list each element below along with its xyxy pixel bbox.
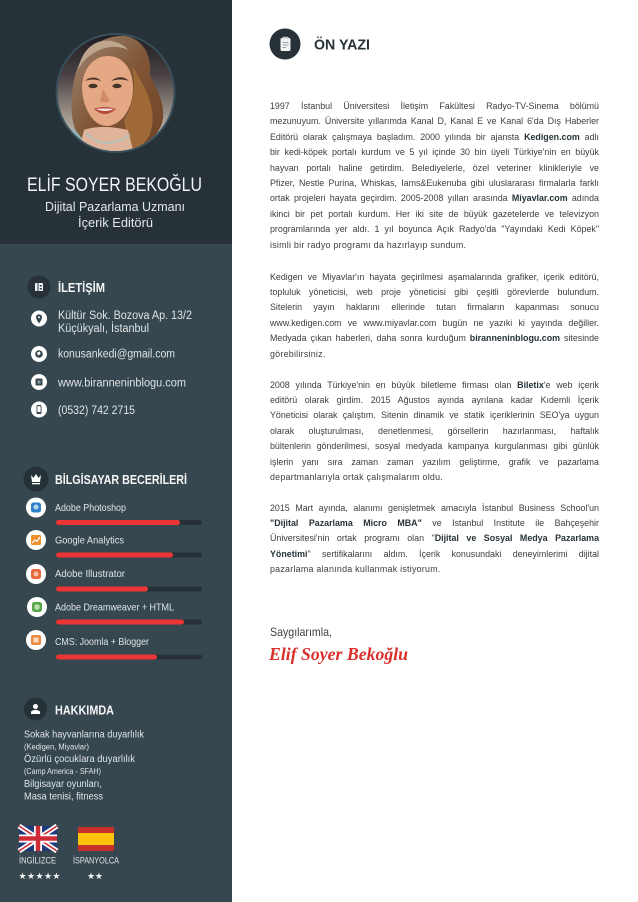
paragraph 3: işlerin yanı sıra zaman zaman yazılım geliştirme, grafik ve pazarlama (270, 456, 599, 466)
paragraph 1: Pfizer, Nestle Purina, Whiskas, Iams&Eukenuba gibi uluslararası firmalarla farklı (270, 178, 599, 188)
website: www.biranneninblogu.com (57, 378, 186, 390)
panel: about (24, 698, 145, 802)
icon: UK flag (19, 826, 57, 851)
paragraph 1: mezunuyum. Üniversite yıllarımda Kanal D, Kanal E ve Kanal 6'da Dış Haberler (270, 116, 599, 126)
paragraph 3: departmanlarıyla ortak çalışmalarım oldu. (270, 472, 443, 482)
paragraph 3: olarak oluşturulması, denetlenmesi, görsellerin hazırlanması, haftalık (270, 426, 599, 436)
paragraph 1: bir kedi-köpek portalı kurdum ve 5 yıl içinde 30 bin üyeli Türkiye'nin en büyük (270, 147, 599, 157)
photo: portrait (55, 33, 176, 154)
skill: CMS: CMS: Joomla + Blogger (55, 636, 149, 648)
address: Kültür Sok. Bozova Ap. 13/2 (58, 310, 192, 322)
paragraph 1: ikinci bir pet portalı kurdum. Her iki site de büyük gazetelerde ve televizyon (270, 209, 599, 219)
icon: Spain flag (78, 827, 114, 851)
paragraph 2: Kedigen ve Miyavlar'ın hayata geçirilmesi aşamalarında grafiker, içerik editörü, (270, 272, 599, 282)
job title line 2: İçerik Editörü (78, 216, 153, 230)
icon: web (31, 374, 47, 390)
paragraph 1: programlarında yer aldı. 1 yıl boyunca Açık Radyo'da "Yayındaki Kedi Köpek" (270, 224, 599, 234)
paragraph 1: isimli bir radyo programı da hazırlayıp sundum. (270, 240, 466, 250)
icon: person (24, 698, 47, 720)
closing: Saygılarımla, (270, 625, 332, 639)
cv graphics layer (0, 0, 408, 902)
skill: CMS (26, 630, 202, 660)
panel: contact (28, 276, 192, 418)
paragraph 4 (270, 502, 600, 574)
icon: location pin (31, 310, 47, 326)
icon: crown (24, 466, 48, 492)
rating: Spanish stars: ★★ (87, 872, 103, 882)
about text: Masa tenisi, fitness (24, 790, 103, 802)
panel: computer skills (24, 466, 202, 660)
email: konusankedi@gmail.com (58, 348, 175, 360)
paragraph 1 (270, 101, 599, 250)
paragraph 3: bültenlerin gönderilmesi, sosyal medyada kampanya kurgulanması gibi günlük (270, 441, 599, 451)
language: English: İNGİLIZCE (19, 856, 56, 866)
paragraph 3: 2008 yılında Türkiye'nin en büyük biletleme firması olan Biletix'e web içerik (270, 380, 599, 390)
paragraph 4: Üniversitesi'nin ortak programı olan "Dijital ve Sosyal Medya Pazarlama (270, 533, 599, 543)
paragraph 4: pazarlama alanında kullanmak istiyorum. (270, 564, 441, 574)
skills heading: BİLGİSAYAR BECERİLERİ (55, 472, 187, 487)
address (58, 310, 192, 335)
icon: globe (31, 346, 47, 362)
language: Spanish: İSPANYOLCA (73, 856, 120, 866)
main heading: ÖN YAZI (314, 36, 370, 54)
skill: Adobe Photoshop: Adobe Photoshop (55, 502, 126, 514)
paragraph 2: Sitelerin yayın haklarını ellerinde tutan firmaların kapanması sonucu (270, 302, 599, 312)
skill: Adobe Illustrator: Adobe Illustrator (55, 568, 125, 580)
skill: Adobe Illustrator (26, 564, 202, 592)
panel: sidebar background (0, 0, 232, 902)
phone: (0532) 742 2715 (58, 405, 135, 417)
signature: Elif Soyer Bekoğlu (268, 644, 408, 664)
about text (24, 728, 145, 802)
paragraph 4: "Dijital Pazarlama Micro MBA" ve Istanbul Institute ile Bahçeşehir (270, 518, 599, 528)
job title: Dijital Pazarlama Uzmanı (45, 200, 185, 214)
skill: Google Analytics: Google Analytics (55, 534, 124, 546)
icon: phone (31, 402, 47, 418)
skill: Adobe Dreamweaver + HTML: Adobe Dreamweaver + HTML (55, 602, 174, 614)
icon: document (270, 28, 300, 60)
about text: Sokak hayvanlarına duyarlılık (24, 728, 145, 740)
paragraph 1: 1997 İstanbul Üniversitesi İletişim Fakültesi Radyo-TV-Sinema bölümü (270, 101, 599, 111)
skill: Adobe Dreamweaver + HTML (27, 597, 202, 624)
panel: profile header (0, 0, 232, 244)
about heading: HAKKIMDA (55, 702, 115, 718)
paragraph 4: Yönetimi" sertifikalarını aldım. İçerik konusundaki deneyimlerimi dijital (270, 549, 599, 559)
address: Küçükyalı, İstanbul (58, 322, 149, 335)
paragraph 3: Yöneticisi olarak çalıştım. Sitenin dinamik ve statik içeriklerinin SEO'ya uygun (270, 410, 599, 420)
paragraph 2: topluluk yöneticisi, web proje yöneticisi gibi çeşitli görevlerde bulundum. (270, 287, 599, 297)
paragraph 2: görebilirsiniz. (270, 348, 326, 358)
contact heading: İLETİŞİM (58, 280, 105, 295)
paragraph 2 (270, 272, 599, 359)
about text: (Kedigen, Miyavlar) (24, 742, 89, 752)
paragraph 3 (270, 380, 599, 482)
skill: Google Analytics (26, 530, 202, 558)
icon: contact book (28, 276, 50, 298)
rating: English stars: ★★★★★ (18, 872, 60, 882)
paragraph 1: Editörü olarak çalışmaya başladım. 2000 yılında bir ajansta Kedigen.com adlı (270, 132, 599, 142)
paragraph 1: ortak projeleri hayata geçirdim. 2005-2008 yılları arasında Miyavlar.com adında (270, 193, 599, 203)
name: ELİF SOYER BEKOĞLU (27, 173, 202, 196)
paragraph 1: hayvan portalı haline getirdim. Belediyelerle, özel veteriner klinikleriyle ve (270, 163, 599, 173)
paragraph 2: www.kedigen.com ve www.miyavlar.com bugün ne yazıki ki yayında değiller. (270, 318, 599, 328)
about text: Bilgisayar oyunları, (24, 778, 102, 790)
paragraph 2: Medyada çıkan haberleri, daha sonra kurduğum biranneninblogu.com sitesinde (270, 333, 599, 343)
panel: languages (18, 826, 120, 882)
about text: Özürlü çocuklara duyarlılık (24, 753, 136, 765)
paragraph 4: 2015 Mart ayında, alanımı genişletmek amacıyla İstanbul Business School'un (270, 502, 599, 512)
paragraph 3: editörü olarak girdim. 2015 Ağustos ayında ayrılana kadar Kıdemli İçerik (270, 395, 599, 405)
about text: (Camp America - SFAH) (24, 767, 101, 776)
skill: Adobe Photoshop (26, 498, 202, 525)
